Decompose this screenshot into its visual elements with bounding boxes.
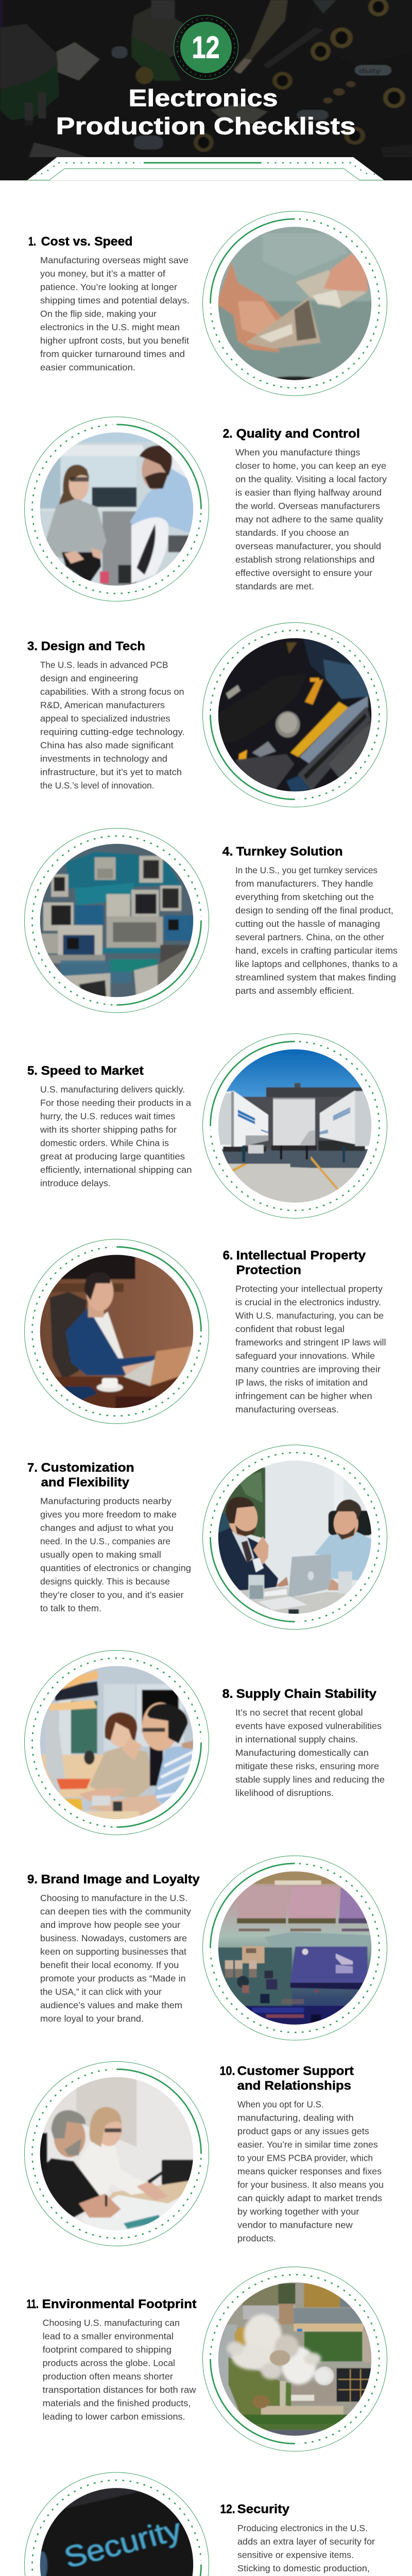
text 6: frameworks and stringent IP laws will bbox=[235, 1337, 386, 1348]
heading 4: Turnkey Solution bbox=[236, 845, 343, 859]
text 6 bbox=[235, 1284, 386, 1415]
header background photo bbox=[0, 0, 412, 180]
photo 6: businessman at a laptop bbox=[25, 1239, 209, 1423]
text 2: overseas manufacturer, you should bbox=[235, 541, 381, 551]
photo 1: hands counting money bbox=[203, 211, 387, 396]
text 11: Choosing U.S. manufacturing can bbox=[43, 2317, 180, 2328]
text 5: For those needing their products in a bbox=[40, 1097, 191, 1108]
text 9: promote your products as “Made in bbox=[40, 1973, 186, 1984]
text 6: confident that robust legal bbox=[235, 1324, 345, 1334]
heading 8: Supply Chain Stability bbox=[236, 1687, 376, 1701]
text 6: IP laws, the risks of imitation and bbox=[235, 1378, 368, 1388]
text 12: Sticking to domestic production, bbox=[237, 2563, 370, 2573]
text 5: great at producing large quantities bbox=[40, 1151, 185, 1161]
text 3 bbox=[40, 659, 185, 790]
text 1: electronics in the U.S. might mean bbox=[40, 322, 180, 332]
text 1: Manufacturing overseas might save bbox=[40, 255, 188, 265]
title: Electronics bbox=[129, 84, 278, 111]
text 7: gives you more freedom to make bbox=[40, 1510, 177, 1520]
text 11: lead to a smaller environmental bbox=[43, 2331, 174, 2341]
text 3: The U.S. leads in advanced PCB bbox=[40, 659, 168, 670]
heading 8: 8. bbox=[222, 1687, 233, 1701]
panel: 3 design and tech bbox=[27, 622, 387, 807]
text 3: design and engineering bbox=[40, 673, 138, 683]
text 2: closer to home, you can keep an eye bbox=[235, 461, 386, 471]
heading 11: 11. bbox=[27, 2297, 39, 2311]
text 2: establish strong relationships and bbox=[235, 554, 375, 565]
text 1: patience. You’re looking at longer bbox=[40, 282, 177, 292]
text 11: footprint compared to shipping bbox=[43, 2344, 171, 2354]
text 3: requiring cutting-edge technology. bbox=[40, 726, 185, 737]
heading 3: 3. bbox=[27, 639, 38, 653]
text 8: It’s no secret that recent global bbox=[235, 1707, 363, 1718]
heading 5: 5. bbox=[27, 1064, 38, 1078]
text 7 bbox=[40, 1496, 191, 1614]
text 4: design to sending off the final product, bbox=[235, 905, 393, 916]
text 1: On the flip side, making your bbox=[40, 309, 157, 319]
text 3: the U.S.’s level of innovation. bbox=[40, 780, 154, 790]
text 4 bbox=[235, 865, 398, 996]
text 7: usually open to making small bbox=[40, 1550, 161, 1560]
text 10: means quicker responses and fixes bbox=[237, 2166, 382, 2176]
text 8 bbox=[235, 1707, 385, 1798]
text 1 bbox=[40, 255, 190, 372]
heading 3: Design and Tech bbox=[41, 639, 145, 653]
text 9 bbox=[40, 1893, 191, 2024]
text 4: like laptops and cellphones, thanks to a bbox=[235, 959, 398, 969]
text 8: stable supply lines and reducing the bbox=[235, 1774, 385, 1785]
text 8: events have exposed vulnerabilities bbox=[235, 1721, 382, 1731]
heading 12: Security bbox=[237, 2502, 289, 2516]
text 10: manufacturing, dealing with bbox=[237, 2112, 354, 2123]
heading 2: 2. bbox=[223, 427, 233, 441]
text 9: keen on supporting businesses that bbox=[40, 1946, 186, 1957]
text 11: production often means shorter bbox=[43, 2371, 173, 2381]
photo 3: computer motherboard bbox=[203, 622, 387, 807]
text 6: infringement can be higher when bbox=[235, 1391, 372, 1401]
text 5: hurry, the U.S. reduces wait times bbox=[40, 1111, 175, 1121]
text 7: to talk to them. bbox=[40, 1603, 101, 1614]
text 3: infrastructure, but it’s yet to match bbox=[40, 767, 182, 777]
panel: 1 cost vs speed bbox=[28, 211, 387, 396]
text 10: When you opt for U.S. bbox=[237, 2099, 324, 2109]
text 8: mitigate these risks, ensuring more bbox=[235, 1761, 379, 1771]
text 11: materials and the finished products, bbox=[43, 2398, 191, 2408]
text 2: When you manufacture things bbox=[235, 447, 360, 457]
text 8: in international supply chains. bbox=[235, 1734, 358, 1744]
panel: 4 turnkey solution bbox=[25, 828, 398, 1013]
text 5: efficiently, international shipping can bbox=[40, 1164, 192, 1175]
heading 6: Intellectual Property bbox=[236, 1248, 366, 1262]
text 2: on the quality. Visiting a local factory bbox=[235, 474, 387, 484]
text 1: shipping times and potential delays. bbox=[40, 295, 190, 306]
text 3: R&D, American manufacturers bbox=[40, 700, 165, 710]
text 12: Producing electronics in the U.S. bbox=[237, 2523, 368, 2533]
text 6: is crucial in the electronics industry. bbox=[235, 1297, 381, 1308]
text 11: leading to lower carbon emissions. bbox=[43, 2411, 185, 2421]
text 11: transportation distances for both raw bbox=[43, 2384, 196, 2395]
number badge: 12 bbox=[174, 15, 238, 79]
heading 7: and Flexibility bbox=[41, 1476, 129, 1489]
photo 2: two engineers talking in a lab bbox=[25, 417, 209, 601]
photo 4: stacked circuit boards bbox=[25, 828, 209, 1013]
panel: 11 environmental footprint bbox=[27, 2267, 387, 2451]
text 7: designs quickly. This is because bbox=[40, 1577, 170, 1587]
heading 7: Customization bbox=[41, 1461, 134, 1475]
heading 6: Protection bbox=[236, 1263, 301, 1277]
photo 5: trailers at a loading dock bbox=[203, 1033, 387, 1218]
text 2: may not adhere to the same quality bbox=[235, 514, 383, 524]
text 11: products across the globe. Local bbox=[43, 2358, 175, 2368]
text 6: Protecting your intellectual property bbox=[235, 1284, 383, 1294]
text 4: everything from sketching out the bbox=[235, 892, 374, 902]
text 4: hand, excels in crafting particular items bbox=[235, 945, 398, 956]
text 9: Choosing to manufacture in the U.S. bbox=[40, 1893, 187, 1903]
photo 12: Security on a screen with a pointer: Security bbox=[61, 2513, 185, 2574]
heading 1: 1. bbox=[28, 235, 36, 248]
text 4: parts and assembly efficient. bbox=[235, 986, 354, 996]
panel: 5 speed to market bbox=[27, 1033, 387, 1218]
text 7: Manufacturing products nearby bbox=[40, 1496, 171, 1506]
text 3: appeal to specialized industries bbox=[40, 713, 170, 723]
text 7: they’re closer to you, and it’s easier bbox=[40, 1590, 184, 1600]
heading 12: 12. bbox=[220, 2502, 235, 2516]
text 11 bbox=[43, 2317, 196, 2421]
text 10: products. bbox=[237, 2233, 276, 2243]
text 1: you money, but it’s a matter of bbox=[40, 268, 165, 279]
text 2: effective oversight to ensure your bbox=[235, 568, 372, 578]
heading 10: Customer Support bbox=[237, 2064, 354, 2078]
text 10: product gaps or any issues gets bbox=[237, 2126, 369, 2136]
ornamental notch at header bottom bbox=[27, 157, 384, 180]
text 5: introduce delays. bbox=[40, 1178, 111, 1188]
text 4: streamlined system that makes finding bbox=[235, 972, 396, 982]
header background photo: duty bbox=[358, 67, 381, 75]
photo 8: two colleagues at a computer bbox=[25, 1650, 209, 1835]
text 9: more loyal to your brand. bbox=[40, 2013, 144, 2024]
panel: 10 customer support and relationships bbox=[25, 2061, 384, 2246]
text 5: with its shorter shipping paths for bbox=[40, 1124, 177, 1134]
heading 1: Cost vs. Speed bbox=[41, 235, 133, 248]
text 1: higher upfront costs, but you benefit bbox=[40, 335, 189, 346]
text 12: adds an extra layer of security for bbox=[237, 2536, 375, 2547]
text 10: vendor to manufacture new bbox=[237, 2219, 353, 2230]
text 7: quantities of electronics or changing bbox=[40, 1563, 191, 1573]
text 2: the world. Overseas manufacturers bbox=[235, 501, 380, 511]
text 7: need. In the U.S., companies are bbox=[40, 1536, 170, 1547]
text 5: domestic orders. While China is bbox=[40, 1138, 169, 1148]
text 4: In the U.S., you get turnkey services bbox=[235, 865, 377, 875]
heading 9: 9. bbox=[27, 1872, 38, 1887]
text 10: easier. You’re in similar time zones bbox=[237, 2139, 378, 2149]
title bbox=[56, 84, 356, 140]
photo 11: aerial view of a factory with steam bbox=[203, 2267, 387, 2451]
number badge: 12: 12 bbox=[192, 30, 219, 65]
panel: 2 quality and control bbox=[25, 417, 387, 601]
text 8: likelihood of disruptions. bbox=[235, 1788, 334, 1798]
text 10: for your business. It also means you bbox=[237, 2179, 384, 2190]
text 1: easier communication. bbox=[40, 362, 135, 372]
text 2: standards are met. bbox=[235, 581, 314, 591]
text 10: by working together with your bbox=[237, 2206, 359, 2216]
text 4: from manufacturers. They handle bbox=[235, 878, 373, 889]
text 10 bbox=[237, 2099, 384, 2243]
text 12: sensitive or expensive items. bbox=[237, 2550, 354, 2560]
text 5 bbox=[40, 1084, 192, 1188]
text 9: audience’s values and make them bbox=[40, 2000, 182, 2010]
photo 9: microchips on a purple-tinted board bbox=[203, 1856, 387, 2040]
text 2: standards. If you choose an bbox=[235, 528, 349, 538]
panel: 6 intellectual property protection bbox=[25, 1239, 386, 1423]
heading 4: 4. bbox=[222, 845, 233, 859]
photo 12: Security on a screen with a pointer bbox=[25, 2472, 209, 2576]
text 9: can deepen ties with the community bbox=[40, 1906, 191, 1917]
text 9: the USA,” it can click with your bbox=[40, 1987, 162, 1997]
text 3: investments in technology and bbox=[40, 753, 167, 764]
heading 11: Environmental Footprint bbox=[42, 2297, 197, 2311]
photo 7: two men at a meeting table bbox=[203, 1445, 387, 1630]
text 6: With U.S. manufacturing, you can be bbox=[235, 1311, 384, 1321]
heading 10: 10. bbox=[219, 2064, 235, 2078]
text 12 bbox=[237, 2523, 385, 2576]
text 9: and improve how people see your bbox=[40, 1920, 180, 1930]
heading 7: 7. bbox=[27, 1461, 38, 1475]
panel: 7 customization and flexibility bbox=[27, 1445, 387, 1630]
panel: 8 supply chain stability bbox=[25, 1650, 385, 1835]
panel: 12 security bbox=[25, 2472, 385, 2576]
text 6: many countries are improving their bbox=[235, 1364, 381, 1375]
panel: 9 brand image and loyalty bbox=[27, 1856, 387, 2040]
text 9: benefit their local economy. If you bbox=[40, 1960, 179, 1970]
photo 10: two colleagues reviewing papers bbox=[25, 2061, 209, 2246]
heading 10: and Relationships bbox=[237, 2079, 351, 2093]
text 9: business. Nowadays, customers are bbox=[40, 1933, 187, 1943]
heading 5: Speed to Market bbox=[41, 1064, 144, 1078]
heading 7 bbox=[27, 1461, 134, 1489]
text 4: several partners. China, on the other bbox=[235, 932, 384, 942]
title: Production Checklists bbox=[56, 113, 356, 140]
text 4: cutting out the hassle of managing bbox=[235, 919, 380, 929]
heading 10 bbox=[219, 2064, 354, 2093]
text 10: to your EMS PCBA provider, which bbox=[237, 2153, 373, 2163]
text 8: Manufacturing domestically can bbox=[235, 1748, 369, 1758]
heading 9: Brand Image and Loyalty bbox=[41, 1872, 200, 1887]
text 3: China has also made significant bbox=[40, 740, 174, 750]
text 6: safeguard your innovations. While bbox=[235, 1351, 375, 1361]
text 2: is easier than flying halfway around bbox=[235, 487, 382, 498]
text 2 bbox=[235, 447, 387, 591]
text 1: from quicker turnaround times and bbox=[40, 349, 185, 359]
heading 2: Quality and Control bbox=[236, 427, 360, 441]
text 3: capabilities. With a strong focus on bbox=[40, 686, 184, 697]
heading 6 bbox=[223, 1248, 366, 1277]
header: dark circuit board photo with title bbox=[0, 0, 412, 180]
text 6: manufacturing overseas. bbox=[235, 1404, 339, 1415]
text 10: can quickly adapt to market trends bbox=[237, 2193, 382, 2203]
heading 6: 6. bbox=[223, 1248, 233, 1262]
text 5: U.S. manufacturing delivers quickly. bbox=[40, 1084, 185, 1094]
text 7: changes and adjust to what you bbox=[40, 1523, 174, 1533]
